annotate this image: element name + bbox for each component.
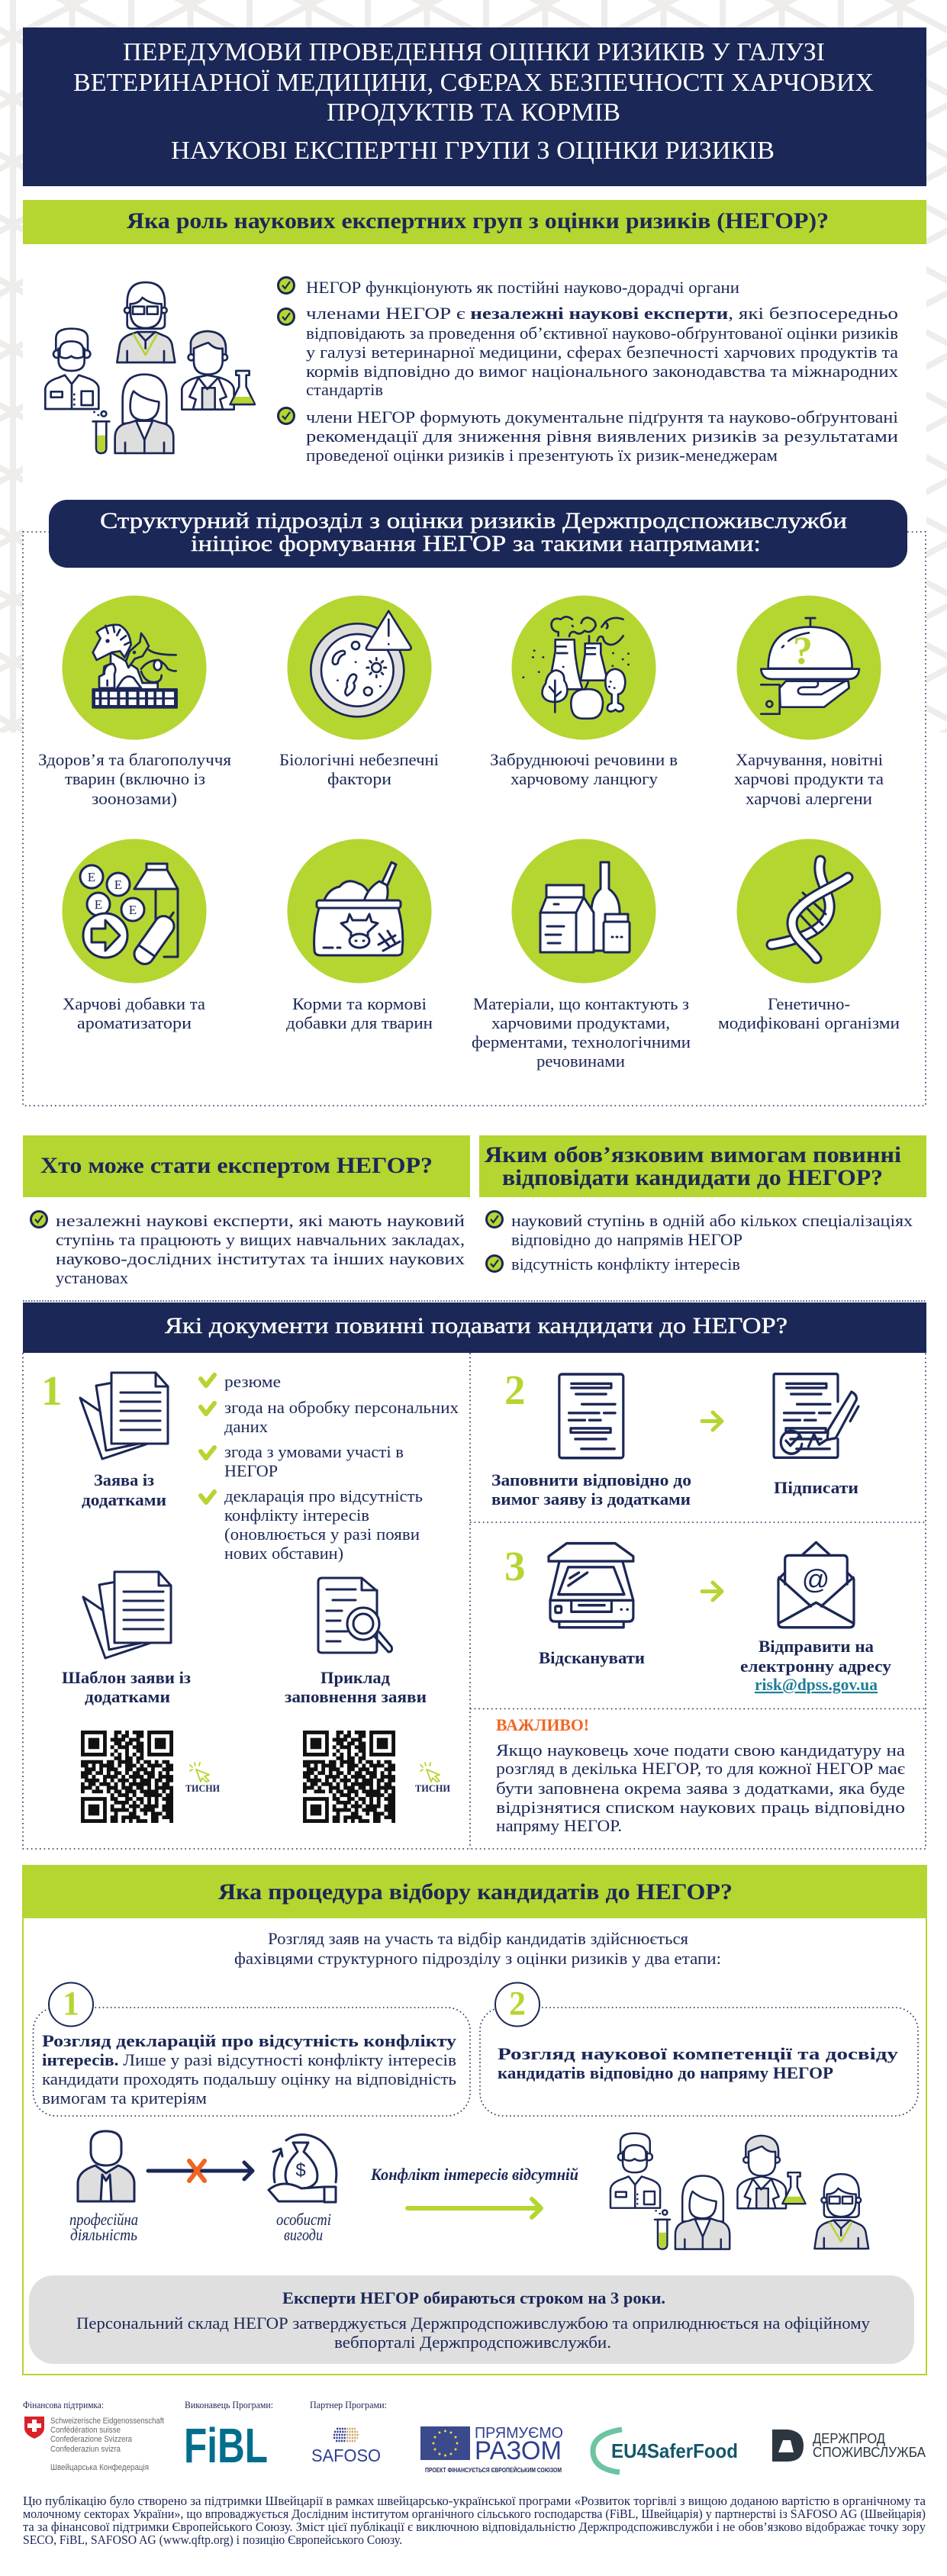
click hint 2 [415,1763,450,1794]
step 3 number: 3 [504,1543,525,1589]
callout: important: розгляд в декілька НЕГОР, то для кожної НЕГОР має [496,1759,906,1778]
text block: intro: Розгляд заяв на участь та відбір кандидатів здійснюється [268,1929,688,1948]
text block: role bullets: у галузі ветеринарної медицини, сферах безпечності харчових продуктів та [306,343,898,362]
text block: role bullets: стандартів [306,380,383,399]
direction: additives and flavourings [63,839,206,1032]
document checklist: конфлікту інтересів [224,1505,369,1525]
callout: important: бути заповнена окрема заява з додатками, яка буде [496,1779,905,1798]
stage 1: вимогам та критеріям [42,2088,207,2107]
callout: term of experts: Персональний склад НЕГОР затверджується Держпродспоживслужбою та оприлюднюється на офіційному [76,2314,870,2333]
icon: envelope [778,1542,854,1628]
text block: requirements: відповідно до напрямів НЕГОР [511,1230,742,1249]
direction: additives and flavourings: ароматизатори [77,1013,192,1032]
document checklist: нових обставин) [224,1544,343,1563]
label: sign: Підписати [774,1478,858,1497]
label: example [285,1668,427,1706]
logo: State Service [772,2429,926,2462]
callout: term of experts [29,2275,914,2364]
title banner [23,27,926,186]
document checklist: резюме [224,1372,281,1391]
callout: important: напряму НЕГОР. [496,1816,622,1835]
QR code: template [81,1732,173,1821]
direction: contaminants: харчовому ланцюгу [511,769,658,788]
arrow with cross: conflict [148,2161,253,2181]
logo: Swiss Confederation: Schweizerische Eidgenossenschaft [50,2417,164,2426]
stage 2: Розгляд наукової компетенції та досвіду [498,2044,898,2063]
direction: additives and flavourings: E [95,897,102,912]
text block: role bullets: кормів відповідно до вимог національного законодавства та міжнародних [306,362,898,381]
label: personal benefits: особисті [276,2210,331,2229]
heading: mandatory requirements [479,1135,926,1197]
label: professional activity: професійна [69,2210,138,2229]
label: example: Приклад [320,1668,390,1687]
text block: who can be an expert: ступінь та працюють у вищих навчальних закладах, [56,1230,465,1249]
arrow [702,1583,722,1600]
logo: EU moving together: ПРОЕКТ ФІНАНСУЄТЬСЯ ЄВРОПЕЙСЬКИМ СОЮЗОМ [425,2467,562,2474]
direction: GMO [718,839,900,1032]
stage 1: кандидати проходять подальшу оцінку на відповідність [42,2069,456,2088]
text block: role bullets: члени НЕГОР формують документальне підґрунтя та науково-обґрунтовані [306,407,898,427]
heading: documents: Які документи повинні подавати кандидати до НЕГОР? [165,1313,788,1338]
panel: directions [23,500,926,1106]
stage 2 [480,1982,918,2116]
document checklist: даних [224,1417,268,1436]
logo: SAFOSO: SAFOSO [311,2446,381,2465]
direction: nutrition, novel foods, allergens: ? [793,630,813,673]
stage 1: 1 [63,1985,79,2022]
direction: biological hazards: Біологічні небезпечні [279,750,439,769]
icon: sign document [774,1374,858,1457]
text block: who can be an expert: науково-дослідних інститутах та інших наукових [56,1249,465,1268]
text block: role bullets: членами НЕГОР є незалежні наукові експерти , які безпосередньо [306,304,898,323]
panel: documents [23,1353,926,1849]
heading: mandatory requirements: відповідати кандидати до НЕГОР? [502,1165,883,1190]
logos: funding label: Фінансова підтримка: [23,2399,104,2410]
direction: biological hazards: фактори [327,769,391,788]
title banner: НАУКОВІ ЕКСПЕРТНІ ГРУПИ З ОЦІНКИ РИЗИКІВ [171,137,775,165]
stage 1 [34,1982,470,2116]
heading: who can become an expert [23,1135,470,1197]
logo: EU4SaferFood [593,2429,738,2472]
icon: expert group [610,2133,868,2249]
heading: who can become an expert: Хто може стати експертом НЕГОР? [40,1153,433,1178]
direction: biological hazards [279,595,439,788]
callout: term of experts: Експерти НЕГОР обираються строком на 3 роки. [282,2288,665,2307]
stage 2: кандидатів відповідно до напряму НЕГОР [498,2063,833,2082]
label: scan: Відсканувати [539,1648,645,1667]
callout: term of experts: вебпорталі Держпродспоживслужби. [334,2333,611,2352]
text block: disclaimer [23,2494,926,2547]
logo: State Service: ДЕРЖПРОД [813,2431,885,2446]
document checklist: декларація про відсутність [224,1486,423,1505]
text block: requirements: відсутність конфлікту інтересів [511,1254,740,1274]
direction: nutrition, novel foods, allergens: харчові алергени [746,789,872,808]
text block: who can be an expert: незалежні наукові експерти, які мають науковий [56,1211,465,1230]
document checklist: згода на обробку персональних [224,1398,459,1417]
heading: structural unit: ініціює формування НЕГОР за такими напрямами: [191,531,761,556]
text block: disclaimer: SECO, FiBL, SAFOSO AG (www.qftp.org) і позицію Європейського Союзу. [23,2533,402,2547]
heading: role of expert groups [23,200,926,244]
direction: additives and flavourings: E [114,877,122,892]
heading: role of expert groups: Яка роль наукових експертних груп з оцінки ризиків (НЕГОР)? [127,208,829,233]
direction: contact materials, enzymes: ферментами, технологічними [472,1032,691,1051]
icon: document with magnifier [318,1578,392,1653]
icon: four experts [45,282,255,453]
title banner: ПЕРЕДУМОВИ ПРОВЕДЕННЯ ОЦІНКИ РИЗИКІВ У ГАЛУЗІ [123,38,825,66]
direction: animal health: Здоров’я та благополуччя [38,750,231,769]
QR code: example [303,1732,395,1821]
text block: who can be an expert: установах [56,1268,128,1287]
logo: Swiss Confederation: Confederazione Svizzera [50,2435,133,2444]
label: no conflict of interest: Конфлікт інтересів відсутній [370,2165,578,2184]
direction: nutrition, novel foods, allergens [734,595,884,808]
label: application: Заява із [94,1470,154,1489]
stage 1: Розгляд декларацій про відсутність конфлікту [42,2031,456,2050]
direction: additives and flavourings: E [88,870,95,884]
text block: intro [234,1929,721,1968]
logo: Swiss Confederation: Confederaziun svizra [50,2445,121,2454]
callout: important [496,1715,906,1835]
stage 2: 2 [509,1985,526,2022]
label: template [62,1668,191,1706]
logo: EU4SaferFood: EU4SaferFood [611,2439,738,2462]
direction: contaminants: Забруднюючі речовини в [490,750,678,769]
text block: disclaimer: та за фінансової підтримки Європейського Союзу. Зміст цієї публікації є виключною відповідальністю Держпродспоживслужби і не обов’язково відображає точку зору [23,2520,926,2534]
logos: implementer label: Виконавець Програми: [185,2399,273,2410]
direction: feed and feed additives: Корми та кормові [292,994,427,1013]
direction: additives and flavourings: E [129,903,137,917]
icon: template documents [83,1572,171,1658]
icon: scanner [549,1544,633,1628]
icon: application form [559,1374,623,1458]
label: template: Шаблон заяви із [62,1668,191,1687]
callout: important: ВАЖЛИВО! [496,1715,589,1734]
logo: FiBL: FiBL [184,2418,268,2473]
title banner: ВЕТЕРИНАРНОЇ МЕДИЦИНИ, СФЕРАХ БЕЗПЕЧНОСТІ ХАРЧОВИХ [73,69,874,97]
icon: personal benefits [269,2135,337,2202]
direction: animal health [38,595,231,808]
text block: role bullets [278,278,898,465]
label: template: додатками [85,1687,170,1706]
logos: partner label: Партнер Програми: [310,2399,387,2410]
logo: Swiss Confederation: Швейцарська Конфедерація [50,2463,149,2472]
step 1 number: 1 [41,1367,63,1414]
label: fill in: вимог заяву із додатками [491,1489,691,1509]
text block: requirements: науковий ступінь в одній або кількох спеціалізаціях [511,1211,913,1230]
label: professional activity [69,2210,138,2244]
direction: GMO: модифіковані організми [718,1013,900,1032]
label: fill in [491,1470,691,1509]
title banner: ПРОДУКТІВ ТА КОРМІВ [327,98,620,127]
label: send to email [740,1637,891,1694]
label: personal benefits: вигоди [284,2225,323,2244]
direction: feed and feed additives: добавки для тварин [286,1013,433,1032]
label: send to email: електронну адресу [740,1657,891,1676]
logo: Swiss Confederation [24,2417,164,2472]
label: fill in: Заповнити відповідно до [491,1470,691,1489]
heading: selection procedure [23,1866,926,1918]
heading: structural unit: Структурний підрозділ з оцінки ризиків Держпродспоживслужби [100,508,847,533]
callout: important: відрізнятися списком наукових праць відповідно [496,1798,905,1817]
click hint 1 [185,1763,220,1794]
heading: mandatory requirements: Яким обов’язковим вимогам повинні [485,1142,901,1167]
heading: documents [23,1301,926,1353]
direction: additives and flavourings: Харчові добавки та [63,994,205,1013]
panel: selection procedure [23,1866,926,2375]
label: send to email: risk@dpss.gov.ua [755,1675,878,1694]
heading: selection procedure: Яка процедура відбору кандидатів до НЕГОР? [218,1879,733,1905]
arrow [702,1412,722,1430]
callout: important: Якщо науковець хоче подати свою кандидатуру на [496,1740,905,1760]
direction: contact materials, enzymes: харчовими продуктами, [491,1013,670,1032]
stage 1: інтересів. Лише у разі відсутності конфлікту інтересів [42,2050,456,2069]
logo: EU moving together: ПРЯМУЄМО [475,2425,563,2442]
click hint 2: ТИСНИ [415,1782,450,1794]
logo: EU moving together [420,2425,563,2474]
text block: role bullets: НЕГОР функціонують як постійні науково-дорадчі органи [306,278,739,297]
direction: nutrition, novel foods, allergens: харчові продукти та [734,769,884,788]
logo: SAFOSO [311,2429,381,2465]
heading: structural unit [49,500,907,568]
text block: who can be an expert [31,1211,465,1287]
label: professional activity: діяльність [70,2225,137,2244]
icon: professional [78,2131,134,2201]
direction: GMO: Генетично- [768,994,850,1013]
direction: animal health: зоонозами) [92,789,177,808]
label: application: додатками [82,1490,166,1509]
logo: State Service: СПОЖИВСЛУЖБА [813,2445,926,2460]
direction: contact materials, enzymes: Матеріали, що контактують з [473,994,689,1013]
text block: intro: фахівцями структурного підрозділу з оцінки ризиків у два етапи: [234,1949,721,1968]
arrow: green [407,2199,541,2217]
document checklist: (оновлюється у разі появи [224,1525,420,1544]
logo: EU moving together: РАЗОМ [475,2436,562,2465]
text block: role bullets: рекомендації для зниження рівня виявлених ризиків за результатами [306,427,898,446]
label: personal benefits [276,2210,331,2244]
document checklist [201,1372,459,1563]
direction: contaminants [490,595,678,788]
logo: Swiss Confederation: Confédération suisse [50,2426,121,2435]
icon: application documents [80,1373,168,1459]
text block: role bullets: проведеної оцінки ризиків і презентують їх ризик-менеджерам [306,446,778,465]
click hint 1: ТИСНИ [185,1782,220,1794]
document checklist: НЕГОР [224,1461,278,1480]
label: application [82,1470,166,1509]
label: send to email: Відправити на [759,1637,874,1656]
text block: requirements [487,1211,913,1274]
text block: disclaimer: Цю публікацію було створено за підтримки Швейцарії в рамках швейцарсько-української програми «Розвиток торгівлі з вищою доданою вартістю в органічному та [23,2494,926,2508]
step 2 number: 2 [504,1367,525,1413]
icon: dollar sign: $ [295,2160,306,2181]
panel: documents: @ [802,1563,829,1595]
direction: nutrition, novel foods, allergens: Харчування, новітні [736,750,883,769]
text block: role bullets: відповідають за проведення об’єктивної науково-обґрунтованої оцінки ризиків [306,324,898,343]
direction: contact materials, enzymes: речовинами [536,1051,625,1071]
label: example: заповнення заяви [285,1687,427,1706]
direction: contact materials, enzymes [472,839,691,1071]
direction: feed and feed additives [286,839,433,1032]
document checklist: згода з умовами участі в [224,1442,404,1461]
direction: animal health: тварин (включно із [65,769,205,788]
